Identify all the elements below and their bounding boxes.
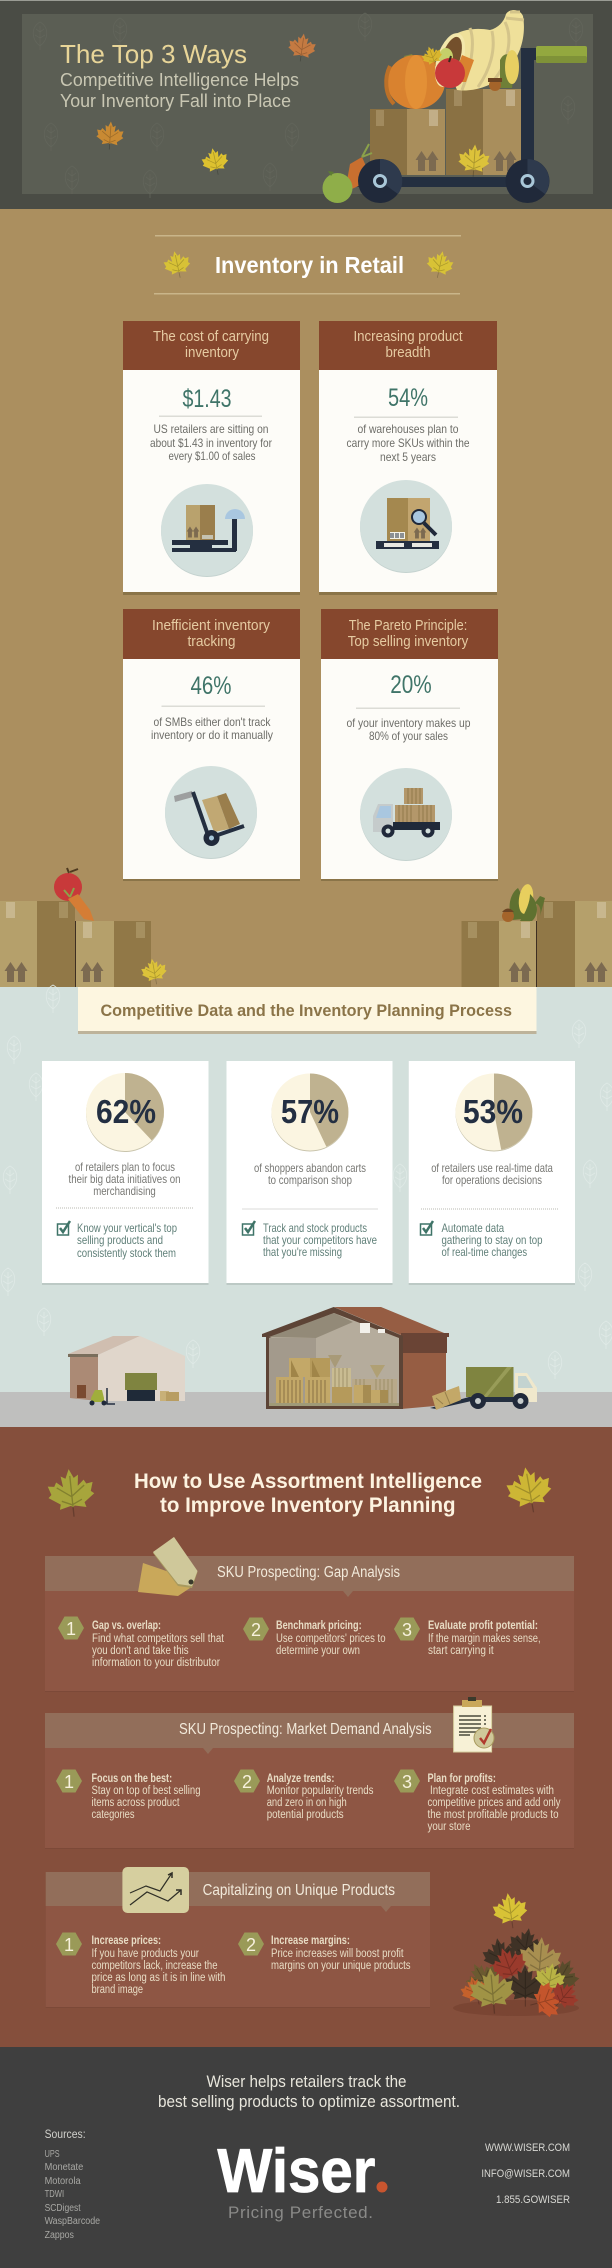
footer contact details: INFO@WISER.COM (481, 2168, 570, 2180)
hero title: The Top 3 Ways (60, 39, 247, 69)
icon: checkbox (242, 1221, 255, 1235)
panel: 53% stat: gathering to stay on top (442, 1233, 543, 1247)
stacked boxes right with corn and acorn (462, 883, 612, 987)
panel: 57% stat: that your competitors have (263, 1233, 377, 1247)
panel: increasing product breadth: 54% (388, 384, 428, 412)
step 1 (56, 1932, 226, 1996)
footer call to action (158, 2072, 460, 2111)
panel: 53% stat: of retailers use real-time data (431, 1161, 553, 1175)
small warehouse with forklift (68, 1336, 185, 1406)
icon: checkbox (420, 1221, 433, 1235)
hero title (60, 39, 299, 111)
step 1: you don't and take this (92, 1645, 189, 1657)
step 1: Increase prices: (92, 1935, 161, 1947)
step 3: Integrate cost estimates with (430, 1785, 554, 1797)
pie chart 62 (86, 1073, 164, 1152)
panel: 53% stat: 53% (463, 1093, 523, 1130)
panel: 53% stat: Automate data (442, 1221, 504, 1235)
footer sources: Motorola (45, 2176, 81, 2187)
icon: delivery truck with crates (360, 768, 452, 861)
icon: checkbox (58, 1221, 70, 1235)
panel: inefficient inventory tracking (123, 609, 300, 881)
footer sources (45, 2127, 100, 2241)
panel: 62% stat: selling products and (77, 1233, 163, 1247)
panel: inefficient inventory tracking: inventory or do it manually (151, 728, 273, 742)
hero faint background leaves (33, 13, 583, 198)
mint section faint leaves (1, 985, 612, 1379)
panel: the pareto principle (321, 609, 498, 881)
panel: 57% stat (226, 1061, 392, 1285)
step 2: Increase margins: (271, 1935, 350, 1947)
step 2: 2 (242, 1772, 252, 1792)
heading: How to Use Assortment Intelligence: How to Use Assortment Intelligence (134, 1470, 482, 1493)
panel: 53% stat: of real-time changes (442, 1245, 527, 1259)
heading: Competitive Data and the Inventory Planning Process: Competitive Data and the Inventory Planning Process (100, 1001, 512, 1020)
large warehouse cutaway with crates (262, 1307, 449, 1409)
step 1: brand image (92, 1984, 143, 1996)
panel: increasing product breadth: of warehouses plan to (358, 422, 459, 436)
step 3: 3 (402, 1772, 412, 1792)
panel: 57% stat: Track and stock products (263, 1221, 367, 1235)
step 2: margins on your unique products (271, 1960, 411, 1972)
pie chart 53 (456, 1074, 532, 1152)
panel: the pareto principle: Top selling inventory (348, 633, 469, 650)
step 2: determine your own (276, 1645, 360, 1657)
panel: inefficient inventory tracking: of SMBs either don't track (154, 715, 271, 729)
step 1: Find what competitors sell that (92, 1633, 225, 1645)
panel: 53% stat (409, 1061, 575, 1285)
step 3: Evaluate profit potential: (428, 1620, 538, 1632)
step 2: Price increases will boost profit (271, 1948, 404, 1960)
step 2 (243, 1618, 386, 1657)
step 1: If you have products your (92, 1948, 199, 1960)
step 1: Stay on top of best selling (92, 1785, 200, 1797)
hero title: Your Inventory Fall into Place (60, 91, 291, 111)
footer sources: TDWI (45, 2189, 64, 2200)
footer sources: Zappos (45, 2230, 74, 2241)
step 1: items across product (92, 1797, 180, 1809)
heading: Inventory in Retail: Inventory in Retail (215, 252, 404, 278)
icon: hand truck with box (165, 766, 257, 859)
icon: clipboard (454, 1697, 494, 1752)
footer call to action: Wiser helps retailers track the (206, 2072, 406, 2091)
panel: 57% stat: of shoppers abandon carts (254, 1161, 366, 1175)
panel: inefficient inventory tracking: 46% (190, 672, 232, 700)
step 3: If the margin makes sense, (428, 1633, 541, 1645)
pie chart 57 (272, 1074, 348, 1152)
footer sources: SCDigest (45, 2203, 81, 2214)
footer contact details: 1.855.GOWISER (496, 2194, 570, 2206)
panel: SKU Prospecting Gap Analysis: SKU Prospecting: Gap Analysis (217, 1564, 400, 1581)
icon: trend chart (122, 1867, 189, 1913)
hero title: Competitive Intelligence Helps (60, 70, 299, 90)
step 3: start carrying it (428, 1645, 494, 1657)
panel: cost of carrying inventory: US retailers are sitting on (154, 422, 268, 436)
panel: 62% stat (42, 1061, 208, 1285)
heading: How to Use Assortment Intelligence (46, 1464, 555, 1519)
step 2: 2 (246, 1935, 256, 1955)
panel: Capitalizing on Unique Products: Capitalizing on Unique Products (203, 1882, 395, 1899)
step 1: 1 (64, 1772, 74, 1792)
panel: the pareto principle: of your inventory makes up (346, 716, 471, 730)
step 2: potential products (267, 1809, 344, 1821)
step 1: categories (92, 1809, 135, 1821)
footer sources: WaspBarcode (45, 2216, 100, 2227)
footer call to action: best selling products to optimize assortment. (158, 2092, 460, 2111)
step 3: 3 (402, 1620, 412, 1640)
delivery truck with ramp (430, 1367, 537, 1410)
step 1: information to your distributor (92, 1657, 220, 1669)
step 2: and zero in on high (267, 1797, 347, 1809)
panel: the pareto principle: 20% (390, 671, 432, 699)
footer logo: Wiser: Pricing Perfected. (228, 2203, 373, 2222)
step 1: competitors lack, increase the (92, 1960, 218, 1972)
panel: increasing product breadth: next 5 years (380, 450, 436, 464)
footer contact details (481, 2142, 570, 2206)
step 2: Benchmark pricing: (276, 1620, 362, 1632)
panel: 62% stat: their big data initiatives on (68, 1172, 180, 1186)
step 3: Plan for profits: (428, 1773, 496, 1785)
panel: cost of carrying inventory: every $1.00 of sales (168, 449, 256, 463)
step 1: 1 (64, 1935, 74, 1955)
footer sources: Sources: (45, 2127, 86, 2141)
panel: SKU Prospecting Gap Analysis (45, 1537, 574, 1692)
footer logo: Wiser: Wiser (217, 2137, 375, 2206)
footer sources: UPS (45, 2149, 60, 2160)
step 1: price as long as it is in line with (92, 1972, 226, 1984)
heading: How to Use Assortment Intelligence: to Improve Inventory Planning (160, 1494, 456, 1517)
panel: 62% stat: merchandising (93, 1184, 156, 1198)
panel: cost of carrying inventory (123, 321, 300, 595)
footer sources: Monetate (45, 2162, 84, 2173)
step 1: Focus on the best: (92, 1773, 172, 1785)
step 2: 2 (251, 1620, 261, 1640)
icon: box with magnifier on pallet (360, 480, 452, 573)
step 1 (58, 1616, 225, 1669)
step 3 (394, 1770, 561, 1833)
heading: Competitive Data and the Inventory Planning Process (78, 987, 536, 1034)
step 3: competitive prices and add only (428, 1797, 561, 1809)
panel: 62% stat: of retailers plan to focus (75, 1160, 175, 1174)
panel: Capitalizing on Unique Products (46, 1867, 430, 2008)
panel: 62% stat: consistently stock them (77, 1246, 176, 1260)
panel: 53% stat: for operations decisions (442, 1173, 542, 1187)
footer contact details: WWW.WISER.COM (485, 2142, 570, 2154)
panel: the pareto principle: 80% of your sales (369, 729, 448, 743)
step 2 (238, 1932, 411, 1972)
panel: 57% stat: that you're missing (263, 1245, 342, 1259)
panel: cost of carrying inventory: inventory (185, 344, 239, 361)
stacked boxes left with apple and carrot (0, 868, 169, 987)
step 2: Analyze trends: (267, 1773, 334, 1785)
panel: 57% stat: 57% (281, 1093, 339, 1130)
step 1 (56, 1770, 200, 1821)
panel: cost of carrying inventory: about $1.43 in inventory for (150, 436, 272, 450)
icon: price tags (138, 1537, 198, 1596)
step 2: Use competitors' prices to (276, 1633, 386, 1645)
step 1: 1 (66, 1619, 76, 1639)
panel: increasing product breadth (319, 321, 497, 595)
panel: the pareto principle: The Pareto Principle: (349, 617, 467, 634)
panel: inefficient inventory tracking: Inefficient inventory (152, 617, 270, 634)
panel: inefficient inventory tracking: tracking (188, 633, 236, 650)
step 3: the most profitable products to (428, 1809, 558, 1821)
panel: cost of carrying inventory: The cost of carrying (153, 328, 269, 345)
panel: 57% stat: to comparison shop (268, 1173, 352, 1187)
panel: increasing product breadth: Increasing product (354, 328, 463, 345)
step 1: Gap vs. overlap: (92, 1620, 161, 1632)
panel: 62% stat: Know your vertical's top (77, 1221, 177, 1235)
panel: SKU Prospecting Market Demand Analysis: SKU Prospecting: Market Demand Analysis (179, 1721, 432, 1738)
step 3 (394, 1618, 541, 1657)
icon: box on scale (161, 484, 253, 577)
panel: increasing product breadth: carry more SKUs within the (346, 436, 470, 450)
illustration: leaf pile (453, 1891, 585, 2021)
hero falling leaves (96, 32, 317, 177)
panel: cost of carrying inventory: $1.43 (182, 385, 232, 413)
hero illustration: cart with harvest (322, 10, 587, 203)
heading: Inventory in Retail (154, 235, 461, 294)
step 3: your store (428, 1821, 470, 1833)
panel: SKU Prospecting Market Demand Analysis (45, 1697, 574, 1849)
step 2: Monitor popularity trends (267, 1785, 374, 1797)
panel: 62% stat: 62% (96, 1093, 156, 1130)
panel: increasing product breadth: breadth (386, 344, 430, 361)
step 2 (234, 1770, 374, 1821)
